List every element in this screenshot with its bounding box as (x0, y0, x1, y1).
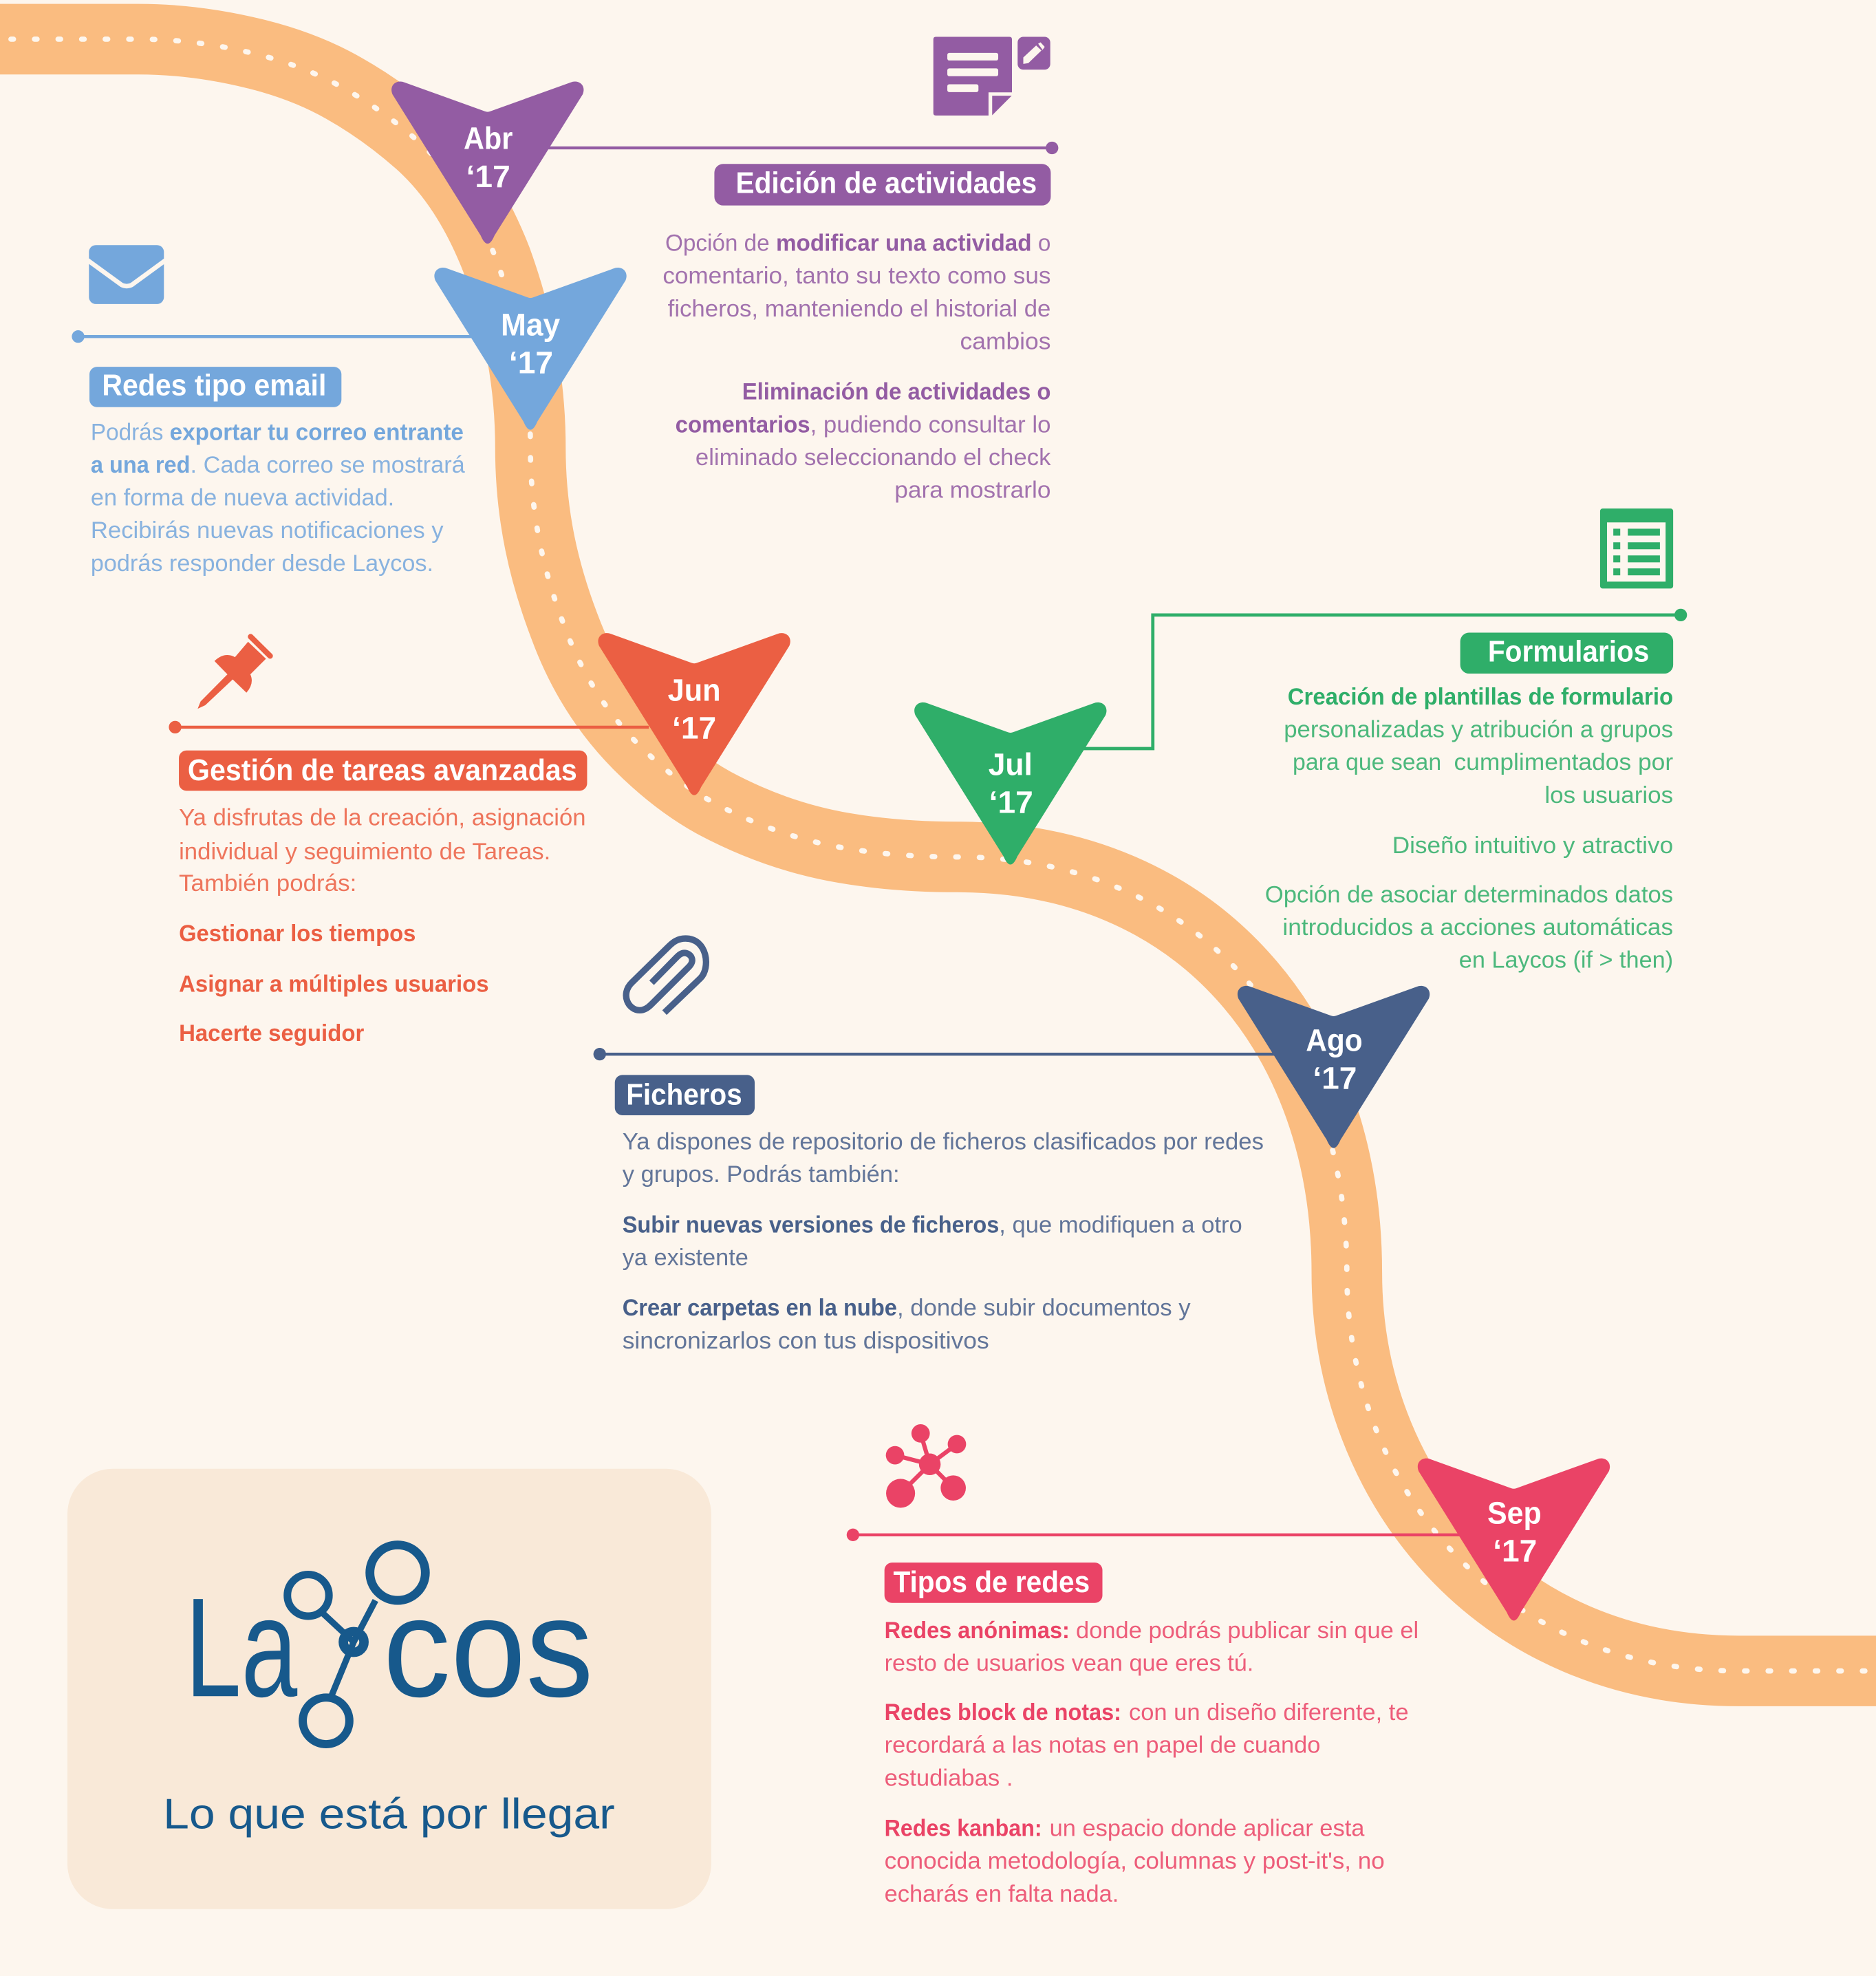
text block: formularios: Opción de asociar determinados datos (1265, 881, 1673, 908)
heading: Edición de actividades: Edición de actividades (736, 167, 1037, 200)
text block: ficheros: Ya dispones de repositorio de ficheros clasificados por redes (623, 1128, 1264, 1155)
marker: May 17 (434, 268, 627, 430)
marker: Jul 17: ‘17 (989, 784, 1033, 819)
text block: ficheros: , que modifiquen a otro (999, 1212, 1242, 1238)
text block: email: a una red (91, 452, 191, 478)
icon: network nodes (886, 1424, 966, 1507)
text block: redes: Redes anónimas: (885, 1618, 1070, 1644)
text block: redes: conocida metodología, columnas y post-it's, no (885, 1848, 1385, 1874)
text block: email: en forma de nueva actividad. (91, 485, 394, 511)
connector line (72, 330, 479, 343)
text block: ficheros: y grupos. Podrás también: (623, 1161, 900, 1188)
text block: redes: donde podrás publicar sin que el (1076, 1618, 1419, 1644)
connector line (847, 1529, 1468, 1541)
text block: tareas: Gestionar los tiempos (179, 921, 416, 947)
marker: Jul 17: Jul (989, 747, 1033, 782)
text block: formularios: Creación de plantillas de formulario (1288, 684, 1673, 710)
heading: Formularios (1460, 633, 1673, 674)
text block: edición: ficheros, manteniendo el historial de (668, 296, 1050, 322)
marker: Jun 17 (598, 633, 790, 795)
text block: formularios: para que sean (1293, 749, 1441, 775)
text block: edición: , pudiendo consultar lo (810, 411, 1050, 438)
text block: ficheros (623, 1128, 1264, 1354)
icon: envelope (87, 245, 166, 304)
heading: Formularios: Formularios (1488, 636, 1649, 669)
text block: tareas: También podrás: (179, 870, 356, 896)
logo icon: connected circles (288, 1545, 425, 1744)
panel: Laycos logo (67, 1469, 711, 1909)
tagline: Lo que está por llegar (163, 1791, 615, 1838)
marker: Jun 17: Jun (668, 672, 721, 707)
text block: edición: Opción de modificar una actividad o (665, 230, 1050, 257)
panel: Jun 17 Gestión de tareas avanzadas (169, 633, 790, 1046)
text block: email: . Cada correo se mostrará (191, 452, 465, 478)
text block: edición: Eliminación de actividades o (742, 379, 1050, 405)
text block: formularios: cumplimentados por (1454, 749, 1673, 775)
text block: formularios: Diseño intuitivo y atractivo (1392, 833, 1673, 859)
connector line (1077, 609, 1687, 749)
marker: Abr 17: Abr (464, 120, 513, 155)
text block: formularios (1265, 684, 1673, 974)
heading: Tipos de redes: Tipos de redes (893, 1566, 1090, 1599)
marker: Sep 17: ‘17 (1493, 1533, 1537, 1568)
text block: tareas: Ya disfrutas de la creación, asignación (179, 805, 586, 831)
text block: redes: estudiabas . (885, 1765, 1013, 1791)
text block: ficheros: , donde subir documentos y (897, 1295, 1191, 1321)
connector line (169, 721, 649, 733)
marker: Abr 17 (391, 81, 583, 244)
text block: edición: comentario, tanto su texto como sus (662, 263, 1050, 289)
text block: formularios: introducidos a acciones automáticas (1282, 914, 1673, 941)
marker: Abr 17: ‘17 (466, 159, 510, 194)
panel: Ago 17 Ficheros (594, 938, 1430, 1354)
text block: redes: echarás en falta nada. (885, 1881, 1119, 1907)
text block: edición: para mostrarlo (894, 477, 1050, 504)
marker: Ago 17: Ago (1306, 1023, 1363, 1058)
text block: formularios: personalizadas y atribución a grupos (1284, 717, 1673, 743)
connector line (594, 1048, 1279, 1060)
panel: Abr 17 Edición de actividades (391, 36, 1058, 504)
panel: Jul 17 Formularios (914, 508, 1687, 974)
marker: May 17: May (501, 307, 561, 342)
text block: tareas (179, 805, 586, 1046)
marker: Ago 17: ‘17 (1313, 1061, 1357, 1096)
marker: Sep 17 (1418, 1459, 1610, 1620)
text block: redes: un espacio donde aplicar esta (1050, 1816, 1365, 1842)
text block: edición (662, 230, 1050, 504)
text block: email: Podrás exportar tu correo entrante (91, 419, 464, 445)
text block: edición: eliminado seleccionando el check (696, 444, 1050, 471)
text block: redes: Redes kanban: (885, 1816, 1042, 1842)
text block: tareas: Hacerte seguidor (179, 1020, 364, 1046)
text block: edición: cambios (960, 328, 1050, 354)
text block: redes: resto de usuarios vean que eres tú. (885, 1651, 1253, 1677)
marker: Jun 17: ‘17 (672, 710, 716, 745)
text block: email: podrás responder desde Laycos. (91, 550, 433, 577)
panel: May 17 Redes tipo email (72, 245, 627, 577)
marker: May 17: ‘17 (509, 345, 553, 380)
text block: tareas: Asignar a múltiples usuarios (179, 971, 489, 997)
text block: ficheros: ya existente (623, 1245, 748, 1271)
heading: Ficheros: Ficheros (626, 1078, 742, 1111)
text block: ficheros: Crear carpetas en la nube (623, 1295, 897, 1321)
panel: Sep 17 Tipos de redes (847, 1424, 1610, 1907)
icon: document with pencil (934, 36, 1050, 116)
text block: ficheros: sincronizarlos con tus dispositivos (623, 1328, 989, 1354)
icon: form sheet (1600, 508, 1673, 588)
heading: Redes tipo email: Redes tipo email (102, 369, 326, 402)
text block: redes: Redes block de notas: (885, 1699, 1121, 1726)
heading: Gestión de tareas avanzadas: Gestión de tareas avanzadas (188, 754, 577, 787)
logo wordmark: La: La (185, 1569, 298, 1726)
text block: ficheros: Subir nuevas versiones de ficheros (623, 1212, 999, 1238)
logo wordmark: cos: cos (383, 1569, 594, 1726)
connector line (542, 142, 1058, 154)
text block: redes: recordará a las notas en papel de cuando (885, 1732, 1320, 1759)
text block: edición: comentarios (676, 411, 810, 438)
text block: email: Recibirás nuevas notificaciones y (91, 517, 444, 544)
marker: Sep 17: Sep (1487, 1495, 1542, 1530)
marker: Jul 17 (914, 702, 1106, 865)
text block: redes: con un diseño diferente, te (1129, 1699, 1409, 1726)
text block: redes (885, 1618, 1419, 1907)
text block: tareas: individual y seguimiento de Tareas. (179, 839, 550, 865)
text block: formularios: en Laycos (if > then) (1459, 947, 1673, 974)
marker: Ago 17 (1238, 986, 1430, 1148)
text block: email (91, 419, 465, 577)
icon: paperclip (626, 938, 706, 1013)
text block: formularios: los usuarios (1544, 782, 1673, 808)
icon: push pin (197, 636, 270, 709)
